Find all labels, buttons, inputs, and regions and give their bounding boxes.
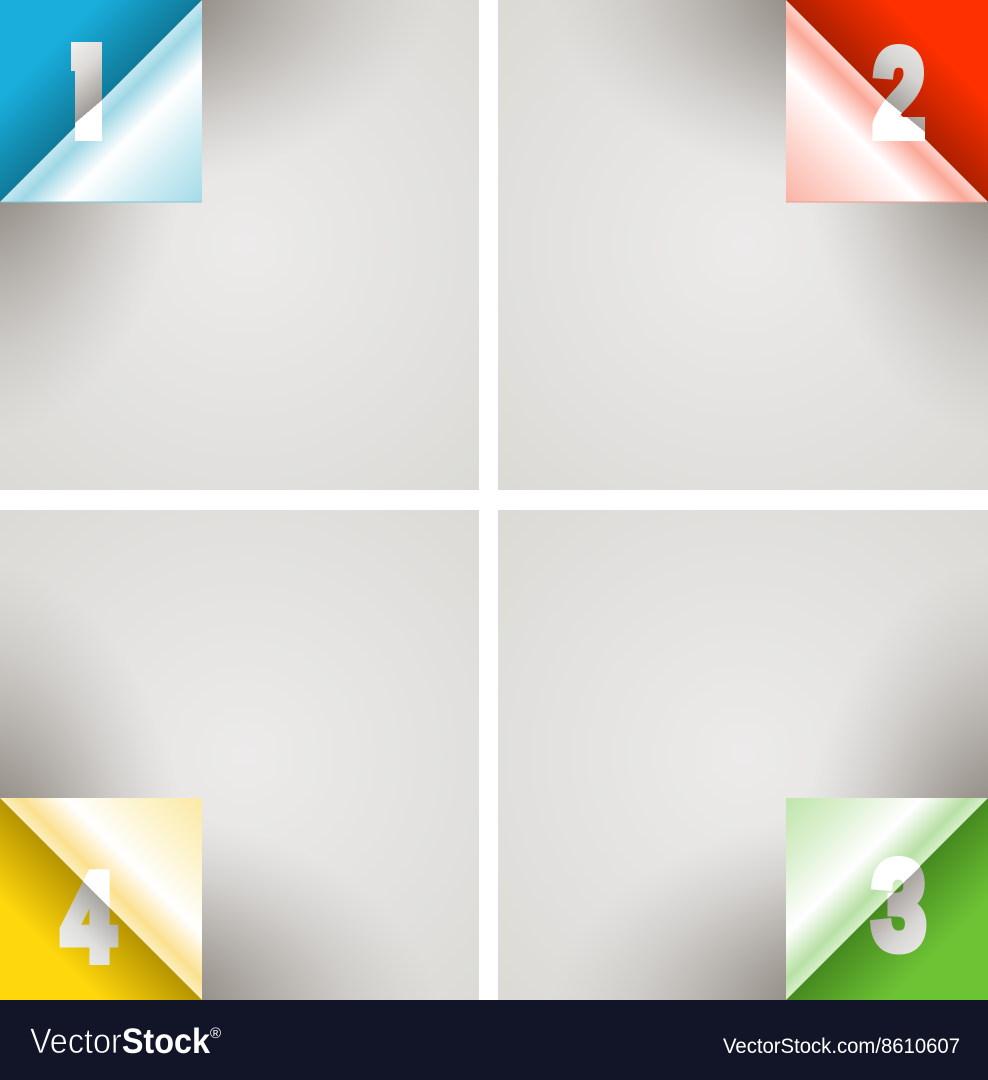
corner 1: curled flap — [0, 0, 202, 202]
number 1: 1 — [62, 23, 118, 166]
panel 2: top right — [498, 0, 988, 490]
corner 1: blue exposed triangle — [0, 0, 202, 202]
number 2: 2 — [873, 25, 925, 163]
panel 4: bottom left — [0, 510, 479, 1000]
footer logo: VectorStock — [30, 1022, 210, 1061]
registered mark: ® — [210, 1025, 221, 1042]
number 4: 4 — [62, 849, 115, 987]
footer image id: VectorStock.com/8610607 — [723, 1034, 960, 1058]
panel 1: top left — [0, 0, 479, 490]
footer bar — [0, 1000, 988, 1080]
panel 3: bottom right — [498, 510, 988, 1000]
number 3: 3 — [872, 837, 926, 975]
